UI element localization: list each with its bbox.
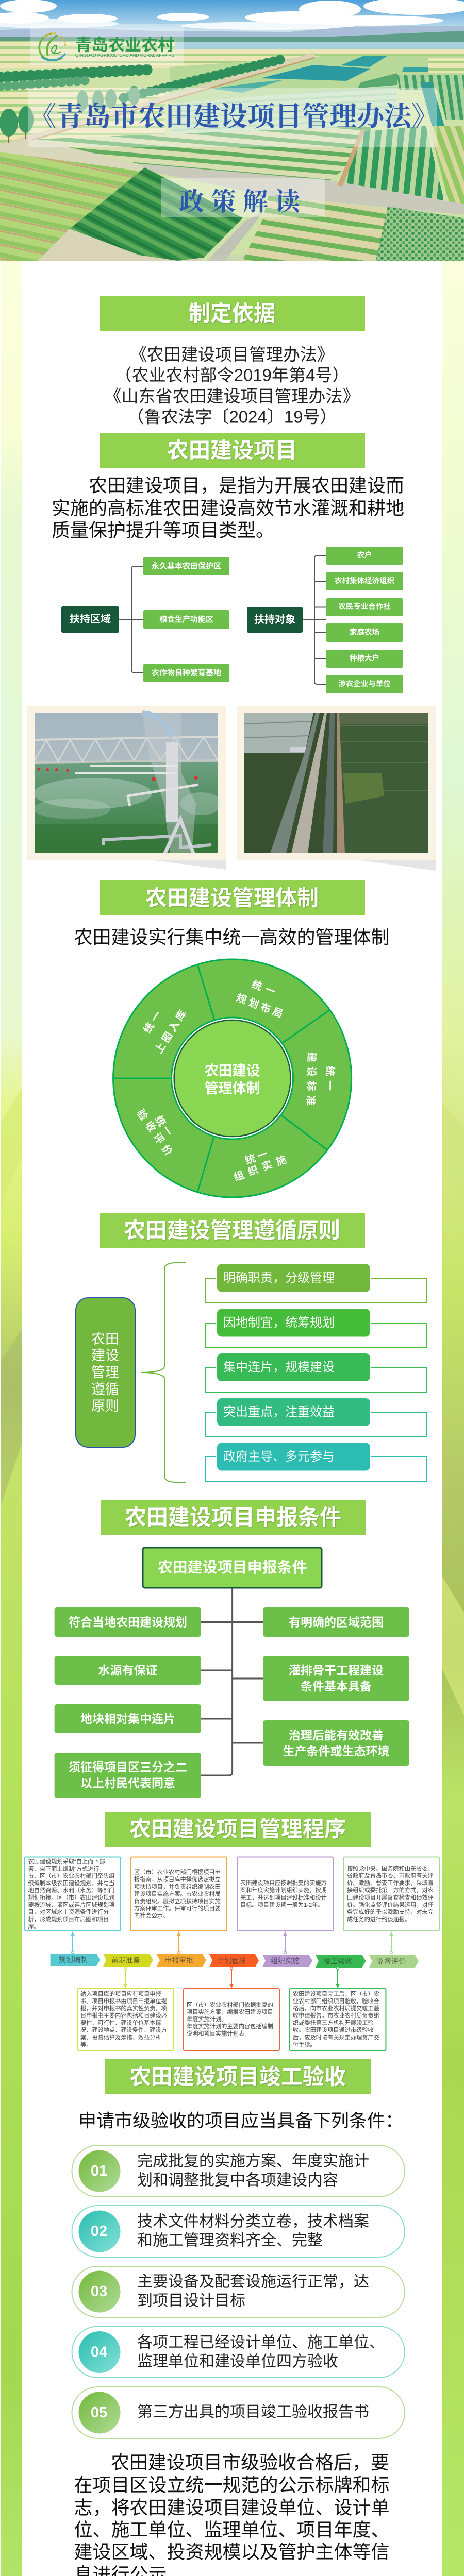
heading: 农田建设管理遵循原则 <box>100 1213 365 1248</box>
process box: application and approval: 向社会公示。 <box>134 1912 169 1919</box>
process box: supervision and evaluation: 价。强化监督评价结果运用，对任 <box>347 1901 434 1908</box>
process box: planning: 要按流域、灌区或连片区域规划项 <box>28 1901 114 1908</box>
circular diagram: management system: 管理体制 <box>205 1081 260 1096</box>
process box: completion acceptance <box>290 1967 386 2050</box>
diagram: support recipients: 农村集体经济组织 <box>335 576 394 585</box>
diagram: support regions: 扶持区域 <box>70 613 111 625</box>
process flow: chevrons: 竣工验收 <box>323 1957 352 1965</box>
condition 02 <box>72 2206 405 2257</box>
process box: completion acceptance: 织或委托第三方机构开展竣工验 <box>293 2019 374 2026</box>
heading: 农田建设项目: 农田建设项目 <box>167 438 297 463</box>
circular diagram: management system <box>113 959 352 1197</box>
process box: planning: 库。 <box>28 1923 40 1930</box>
text block: legal basis: （鲁农法字〔2024〕19号） <box>127 407 337 427</box>
heading: 农田建设管理体制: 农田建设管理体制 <box>145 886 319 910</box>
text block: legal basis <box>104 345 360 427</box>
process box: organize implementation: 农田建设项目应按照批复的实施方 <box>240 1879 327 1887</box>
process box: preparation: 目申报书主要内容包括项目建设必 <box>80 2012 167 2019</box>
diagram: support recipients <box>247 547 403 693</box>
circular diagram: management system: 统一 <box>153 1113 176 1140</box>
process box: planning: 规划衔接。区（市）农田建设规划 <box>28 1894 114 1901</box>
process box: planning: 农田建设规划采取“自上而下部 <box>28 1858 105 1865</box>
process box: supervision and evaluation: 成任务的进行约谈通报。 <box>347 1916 410 1923</box>
process box: completion acceptance: 后，应及时按有关规定办理资产交 <box>293 2034 379 2041</box>
condition 02: 和施工管理资料齐全、完整 <box>137 2232 323 2249</box>
heading: 农田建设项目管理程序: 农田建设项目管理程序 <box>129 1817 346 1841</box>
photo card: center-pivot irrigation <box>27 706 226 870</box>
process box: planning <box>25 1857 121 1954</box>
process box: supervision and evaluation: 价、激励、督查工作要求，采取直 <box>347 1879 434 1887</box>
tree diagram: application conditions: 条件基本具备 <box>301 1680 372 1693</box>
process flow: chevrons <box>51 1954 419 1968</box>
condition 03: 03 <box>91 2283 107 2300</box>
process box: preparation <box>77 1967 174 2050</box>
process box: plan management <box>184 1967 279 2050</box>
process box: application and approval: 负责组织开展拟立项扶持项目实施 <box>134 1897 221 1905</box>
subtitle: 政策解读: 政策解读 <box>179 182 307 218</box>
text block: project definition: 实施的高标准农田建设高效节水灌溉和耕地 <box>52 498 404 518</box>
process box: organize implementation: 案和年度实施计划组织实施，按期 <box>240 1887 327 1894</box>
circular diagram: management system: 上图入库 <box>153 1006 190 1056</box>
tree diagram: application conditions <box>55 1548 409 1798</box>
text block: public signage <box>74 2452 390 2576</box>
process box: completion acceptance: 格后，向市农业农村局提交竣工验 <box>293 2005 379 2012</box>
process box: plan management: 说明和项目实施计划表 <box>187 2030 244 2037</box>
condition 02: 技术文件材料分类立卷，技术档案 <box>137 2213 369 2230</box>
heading: 制定依据 <box>100 296 365 331</box>
process box: planning: 署、自下而上编制”方式进行， <box>28 1865 105 1872</box>
condition 02: 02 <box>91 2223 107 2240</box>
circular diagram: management system: 建设标准 <box>305 1052 318 1110</box>
process box: plan management: 年度实施计划的主要内容包括编制 <box>187 2023 273 2030</box>
circular diagram: management system: 统一 <box>250 978 281 999</box>
process box: application and approval: 方案评审工作。评审可行的项目要 <box>134 1905 221 1912</box>
text block: public signage: 农田建设项目市级验收合格后，要 <box>111 2452 389 2473</box>
process box: organize implementation: 完工，并达到项目建设标准和设计 <box>240 1894 327 1901</box>
process box: completion acceptance: 业农村部门组织项目验收，验收合 <box>293 1997 379 2005</box>
process box: planning: 市、区（市）农业农村部门牵头组 <box>28 1872 114 1879</box>
diagram: management principles: 集中连片，规模建设 <box>223 1360 335 1375</box>
process box: completion acceptance: 收。农田建设项目通过市级验收 <box>293 2026 374 2033</box>
condition 01 <box>72 2145 405 2197</box>
heading: 农田建设项目竣工验收: 农田建设项目竣工验收 <box>129 2065 346 2089</box>
condition 03 <box>72 2266 405 2317</box>
process box: plan management: 年度实施计划。 <box>187 2015 227 2023</box>
heading: 农田建设项目申报条件 <box>101 1500 366 1535</box>
condition 03: 到项目设计目标 <box>137 2293 245 2309</box>
icon: wheat ring logo <box>39 33 65 60</box>
circular diagram: management system: 统一 <box>324 1066 336 1095</box>
logo panel: 青岛农业农村 <box>75 36 174 54</box>
process box: preparation: 报，并对申报书的真实性负责。项 <box>80 2005 167 2012</box>
circular diagram: management system: 农田建设 <box>205 1063 260 1079</box>
text block: public signage: 在项目区设立统一规范的公示标牌和标 <box>74 2474 390 2496</box>
process box: application and approval: 报指南，从项目库中择优选定拟立 <box>134 1876 221 1883</box>
diagram: support recipients: 涉农企业与单位 <box>338 679 391 688</box>
condition 03: 主要设备及配套设施运行正常，达 <box>137 2273 369 2291</box>
process flow: chevrons: 计划管理 <box>217 1957 246 1965</box>
tree diagram: application conditions: 符合当地农田建设规划 <box>69 1616 187 1629</box>
process box: preparation: 况、建设地点、建设条件、建设方 <box>80 2026 167 2033</box>
circular diagram: management system: 统一 <box>243 1146 272 1167</box>
text block: legal basis: （农业农村部令2019年第4号） <box>115 366 349 384</box>
diagram: support regions <box>61 557 229 682</box>
hero illustration: farmland landscape <box>0 0 464 261</box>
condition 04 <box>72 2327 405 2378</box>
text block: public signage: 建设区域、投资规模以及管护主体等信 <box>74 2541 390 2563</box>
subtitle: 政策解读 <box>161 178 325 218</box>
heading: 制定依据: 制定依据 <box>189 301 275 326</box>
diagram: support regions: 永久基本农田保护区 <box>152 562 221 571</box>
diagram: support regions: 农作物良种繁育基地 <box>152 668 221 677</box>
process box: plan management: 区（市）农业农村部门依据批复的 <box>187 2001 273 2008</box>
process box: organize implementation <box>237 1857 333 1954</box>
diagram: management principles: 管理 <box>91 1365 119 1380</box>
process box: planning: 地自然资源、水利（水务）等部门 <box>28 1887 114 1894</box>
condition 04: 监理单位和建设单位四方验收 <box>137 2353 338 2370</box>
circular diagram: management system: 组织实施 <box>232 1151 292 1183</box>
text block: legal basis: 《农田建设项目管理办法》 <box>130 345 334 364</box>
process box: plan management: 项目实施方案，编报农田建设项目 <box>187 2008 273 2015</box>
tree diagram: application conditions: 有明确的区域范围 <box>289 1616 384 1629</box>
process box: supervision and evaluation: 接组织或委托第三方的方式，对农 <box>347 1887 434 1894</box>
logo panel <box>30 24 184 65</box>
heading: 农田建设管理遵循原则: 农田建设管理遵循原则 <box>124 1218 340 1243</box>
diagram: management principles <box>76 1262 426 1483</box>
diagram: support recipients: 家庭农场 <box>350 628 379 637</box>
diagram: support recipients: 农民专业合作社 <box>338 602 391 611</box>
process box: completion acceptance: 付手续。 <box>293 2041 316 2048</box>
process box: planning: 目，对区域水土资源条件进行分 <box>28 1908 109 1916</box>
diagram: management principles: 政府主导、多元参与 <box>223 1450 335 1464</box>
photo card: aerial view of canals and fields <box>237 706 436 871</box>
condition 01: 划和调整批复中各项建设内容 <box>137 2172 338 2189</box>
text block: project definition: 质量保护提升等项目类型。 <box>52 519 274 541</box>
condition 01: 01 <box>91 2163 107 2179</box>
heading: 农田建设项目管理程序 <box>105 1812 371 1847</box>
text block: public signage: 志，将农田建设项目建设单位、设计单 <box>74 2497 390 2518</box>
circular diagram: management system: 统一 <box>141 1006 165 1036</box>
process box: application and approval <box>131 1857 227 1954</box>
text block: project definition: 农田建设项目，是指为开展农田建设而 <box>89 475 404 496</box>
process box: preparation: 纳入项目库的项目应有项目申报 <box>80 1990 161 1997</box>
process flow: chevrons: 规划编制 <box>59 1956 88 1964</box>
process flow: chevrons: 组织实施 <box>271 1957 300 1965</box>
text block: public signage: 位、施工单位、监理单位、项目年度、 <box>74 2519 390 2540</box>
heading: 农田建设项目竣工验收 <box>105 2059 371 2094</box>
heading: 农田建设管理体制 <box>100 880 365 915</box>
process flow: chevrons: 申报审批 <box>164 1956 193 1964</box>
process box: completion acceptance: 收申请报告。市农业农村局负责组 <box>293 2012 379 2019</box>
diagram: support recipients: 种粮大户 <box>350 653 379 663</box>
tree diagram: application conditions: 以上村民代表同意 <box>80 1776 175 1790</box>
text block: project definition <box>52 475 404 541</box>
diagram: management principles: 原则 <box>91 1398 119 1414</box>
tree diagram: application conditions: 水源有保证 <box>98 1664 158 1677</box>
process box: application and approval: 区（市）农业农村部门根据项目申 <box>134 1869 221 1876</box>
diagram: management principles: 突出重点，注重效益 <box>223 1405 335 1419</box>
diagram: support regions: 粮食生产功能区 <box>159 615 213 624</box>
heading: 农田建设项目 <box>100 433 365 468</box>
diagram: management principles: 遵循 <box>91 1382 119 1397</box>
text block: management system intro: 农田建设实行集中统一高效的管理体制 <box>74 926 390 948</box>
process box: supervision and evaluation <box>343 1857 439 1954</box>
circular diagram: management system: 验收评价 <box>134 1107 177 1161</box>
process box: planning: 织编制本级农田建设规划，并与当 <box>28 1879 114 1887</box>
diagram: management principles: 因地制宜，统筹规划 <box>223 1316 335 1330</box>
process box: organize implementation: 目标。项目建设期一般为1-2年。 <box>240 1901 324 1908</box>
condition 05: 第三方出具的项目竣工验收报告书 <box>137 2404 369 2420</box>
text block: acceptance intro: 申请市级验收的项目应当具备下列条件： <box>78 2111 403 2131</box>
tree diagram: application conditions: 生产条件或生态环境 <box>283 1744 390 1758</box>
condition 04: 04 <box>91 2344 107 2361</box>
diagram: management principles: 农田 <box>91 1331 119 1347</box>
diagram: support recipients: 扶持对象 <box>254 613 295 625</box>
process box: completion acceptance: 农田建设项目完工后，区（市）农 <box>293 1990 379 1997</box>
process box: supervision and evaluation: 务完成好的予以激励支持，对未完 <box>347 1908 434 1916</box>
diagram: management principles: 建设 <box>91 1348 119 1363</box>
process flow: chevrons: 前期准备 <box>111 1956 140 1964</box>
process flow: chevrons: 监督评价 <box>377 1957 406 1965</box>
process box: preparation: 要性、可行性、建设单位基本情 <box>80 2019 161 2026</box>
process box: supervision and evaluation: 按照党中央、国务院和山东省委、 <box>347 1865 434 1872</box>
condition 05: 05 <box>91 2404 107 2421</box>
diagram: support recipients: 农户 <box>357 550 372 560</box>
logo panel: QINGDAO AGRICULTURE AND RURAL AFFAIRS <box>75 53 175 58</box>
tree diagram: application conditions: 地块相对集中连片 <box>80 1712 175 1725</box>
main title <box>28 88 439 147</box>
process box: preparation: 等。 <box>80 2041 92 2048</box>
main title: 《青岛市农田建设项目管理办法》 <box>29 95 439 134</box>
condition 01: 完成批复的实施方案、年度实施计 <box>137 2153 369 2170</box>
tree diagram: application conditions: 须征得项目区三分之二 <box>69 1760 187 1774</box>
tree diagram: application conditions: 治理后能有效改善 <box>289 1728 384 1742</box>
tree diagram: application conditions: 灌排骨干工程建设 <box>289 1664 384 1677</box>
heading: 农田建设项目申报条件: 农田建设项目申报条件 <box>125 1505 341 1529</box>
condition 05 <box>72 2387 405 2438</box>
diagram: management principles: 明确职责，分级管理 <box>223 1271 335 1285</box>
process box: application and approval: 项扶持项目，并负责组织编制农田 <box>134 1883 221 1890</box>
process box: planning: 析，形成规划项目布局图和项目 <box>28 1916 109 1923</box>
text block: legal basis: 《山东省农田建设项目管理办法》 <box>104 386 360 406</box>
tree diagram: application conditions: 农田建设项目申报条件 <box>158 1559 307 1576</box>
process box: application and approval: 建设项目实施方案。市农业农村局 <box>134 1890 221 1897</box>
process box: supervision and evaluation: 田建设项目开展督查检查和绩效评 <box>347 1894 434 1901</box>
circular diagram: management system: 规划布局 <box>235 992 287 1021</box>
process box: supervision and evaluation: 省政府及青岛市委、市政府有关评 <box>347 1872 434 1879</box>
condition 04: 各项工程已经设计单位、施工单位、 <box>137 2334 385 2351</box>
process box: preparation: 案、投资估算及筹措、效益分析 <box>80 2034 161 2041</box>
process box: preparation: 书。项目申报书由项目申报单位提 <box>80 1997 167 2005</box>
